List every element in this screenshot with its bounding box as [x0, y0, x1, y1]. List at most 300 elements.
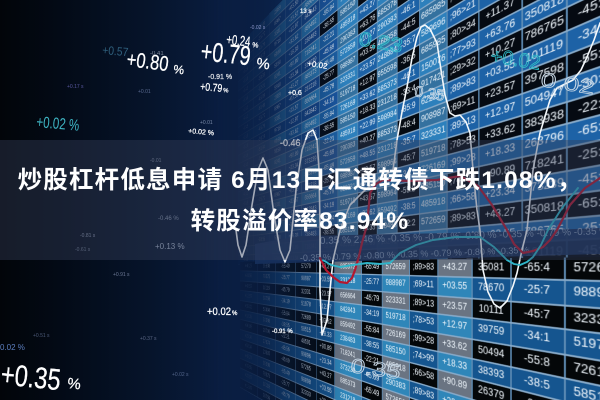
lower perspective data grid: 39759 [263, 296, 270, 303]
upper perspective data grid: +23.34 [289, 161, 298, 172]
upper perspective data grid: +18.33 [289, 232, 298, 240]
title [18, 166, 582, 234]
upper perspective data grid: -55:84 [258, 143, 265, 153]
upper perspective data grid: +33.6 [243, 152, 248, 160]
upper perspective data grid: 718241 [305, 242, 316, 250]
lower perspective data grid: 35698 [263, 263, 270, 270]
lower perspective data grid: -38:55 [364, 339, 379, 352]
upper perspective data grid: -22:2 [401, 217, 415, 229]
upper perspective data grid: -45:79 [258, 40, 265, 53]
upper perspective data grid: +33.62 [360, 207, 375, 218]
upper perspective data grid: +03.55 [289, 91, 298, 104]
upper perspective data grid: +18.3 [243, 238, 248, 244]
lower perspective data grid: -55:8 [524, 352, 550, 370]
upper perspective data grid: +12.97 [485, 100, 515, 122]
upper perspective data grid: 5918 [274, 256, 281, 262]
upper perspective data grid: ;99>28 [450, 152, 476, 169]
upper perspective data grid: 859492 [378, 204, 397, 216]
dim value labels: +0.13 % [155, 242, 185, 251]
upper perspective data grid: -65:49 [323, 161, 334, 172]
upper perspective data grid: -45:69 [258, 174, 265, 183]
upper perspective data grid: +23.3 [243, 257, 248, 263]
lower perspective data grid: -65:49 [364, 385, 379, 400]
upper perspective data grid: 656664 [305, 192, 316, 202]
upper perspective data grid: 842843 [305, 105, 316, 118]
upper perspective data grid: +33.6 [243, 228, 248, 235]
upper perspective data grid: +03.55 [485, 58, 515, 82]
lower perspective data grid: 323331 [386, 295, 406, 307]
upper perspective data grid: 885373 [378, 76, 397, 95]
upper perspective data grid: -35:7 [401, 134, 415, 148]
upper perspective data grid: +43.2 [243, 190, 248, 197]
lower perspective data grid: +43.27 [319, 263, 332, 271]
lower perspective data grid: +23.34 [319, 356, 332, 368]
lower perspective data grid: ;89>13 [413, 298, 434, 310]
upper perspective data grid: +12.97 [360, 72, 375, 89]
upper perspective data grid: -46:1 [401, 67, 415, 84]
lower perspective data grid: -34:1 [524, 329, 550, 346]
upper perspective data grid: 8241 [274, 157, 281, 166]
lower perspective data grid: -22:21 [364, 355, 379, 368]
upper perspective data grid: +23.57 [485, 79, 515, 102]
upper perspective data grid: +90.8 [243, 171, 248, 179]
upper perspective data grid: +43.27 [289, 79, 298, 93]
upper perspective data grid [243, 0, 600, 263]
lower perspective data grid: 35698 [263, 360, 270, 369]
upper perspective data grid: -34:19 [258, 133, 265, 143]
large value labels: +0.79 [199, 36, 252, 71]
lower perspective data grid: -45:56 [281, 344, 290, 354]
ghost teal and pale values on grid [349, 28, 596, 384]
upper perspective data grid: 2659 [274, 4, 281, 16]
upper perspective data grid: +23.34 [289, 255, 298, 262]
lower perspective data grid: 78670 [478, 283, 504, 296]
upper perspective data grid: 6169 [274, 135, 281, 145]
upper perspective data grid: ;89>13 [450, 249, 476, 261]
upper perspective data grid: +03.5 [243, 123, 248, 132]
dim value labels: +0.37 s [140, 336, 157, 342]
upper perspective data grid: -55:8 [401, 184, 415, 197]
large value labels: -0.46 [280, 138, 301, 148]
dim value labels: +0.17 s [67, 84, 84, 90]
upper perspective data grid: -65:49 [323, 55, 334, 70]
upper perspective data grid: 9718 [274, 212, 281, 220]
upper perspective data grid: 572659 [340, 41, 355, 59]
lower perspective data grid: +12.97 [319, 303, 332, 312]
lower perspective data grid: 58515 [301, 326, 311, 335]
dim value labels: -0.01 [150, 158, 162, 164]
ghost teal and pale values on grid: +0.02 [489, 45, 542, 75]
upper perspective data grid: +90.89 [289, 56, 298, 70]
lower perspective data grid: -45:69 [281, 356, 290, 365]
pale ticker band above lower grid: -0.35 % 0.79 % -0.80 % -0.35 % -0.79 % -0.80 % -0.35 % [300, 245, 529, 263]
large value labels: +0.80 [125, 48, 170, 76]
lower perspective data grid: +43.27 [442, 262, 467, 274]
upper perspective data grid: 238483 [305, 130, 316, 142]
upper perspective data grid: -38:55 [258, 71, 265, 83]
upper perspective data grid: +23.5 [243, 209, 248, 216]
title backdrop band [0, 140, 600, 260]
upper perspective data grid: 323331 [421, 124, 445, 142]
upper perspective data grid: 786765 [525, 222, 564, 238]
upper perspective data grid: 726169 [340, 211, 355, 221]
upper perspective data grid: 485918 [340, 239, 355, 248]
upper perspective data grid: 622279 [421, 87, 445, 108]
upper perspective data grid: 786765 [525, 14, 564, 45]
upper perspective data grid: 3331 [274, 201, 281, 209]
upper perspective data grid: 656664 [305, 92, 316, 106]
lower perspective data grid: 32331 [301, 288, 311, 296]
lower perspective data grid: 726169 [386, 328, 406, 341]
upper perspective data grid: 726169 [421, 160, 445, 176]
upper perspective data grid: -38:55 [258, 153, 265, 163]
upper perspective data grid: 373239 [525, 176, 564, 195]
upper perspective data grid: -45:6 [401, 234, 415, 245]
upper perspective data grid: +12.9 [243, 219, 248, 225]
large value labels: % [67, 375, 82, 393]
dim value labels: +0.51 s [33, 333, 50, 339]
upper perspective data grid: +10.27 [485, 37, 515, 63]
upper perspective data grid: ;89>13 [450, 113, 476, 133]
large value labels: +0.02 % [188, 128, 214, 137]
upper perspective data grid: 885373 [378, 124, 397, 140]
upper perspective data grid: -65:49 [258, 102, 265, 113]
upper perspective data grid: -22:21 [323, 28, 334, 45]
title: 转股溢价率83.94% [191, 208, 409, 234]
lower perspective data grid: +40.27 [245, 264, 252, 269]
upper perspective data grid: ;29>32 [450, 55, 476, 78]
dim value labels: -0.46 % [158, 216, 179, 222]
lower perspective data grid: 98898 [301, 375, 311, 386]
upper perspective data grid: -45:79 [258, 205, 265, 213]
large value labels: % [232, 311, 238, 317]
upper perspective data grid: +03.55 [289, 185, 298, 194]
lower perspective data grid: 51978 [301, 301, 311, 309]
upper perspective data grid: -44:5 [401, 16, 415, 35]
lower perspective data grid: -38:5 [524, 374, 550, 394]
upper perspective data grid: 3331 [274, 26, 281, 38]
upper perspective data grid: +33.62 [289, 126, 298, 138]
lower perspective data grid: +90.89 [442, 375, 467, 393]
upper perspective data grid: +03.5 [243, 46, 248, 57]
upper perspective data grid: -85:9 [401, 100, 415, 116]
lower perspective data grid: +43.57 [245, 283, 252, 290]
upper perspective data grid: 290383 [340, 253, 355, 262]
upper perspective data grid: 238483 [378, 220, 397, 231]
upper perspective data grid: 988987 [421, 232, 445, 244]
red trend curve [320, 176, 600, 283]
lower perspective data grid: -38:55 [281, 321, 290, 330]
lower perspective data grid: 859492 [340, 320, 355, 331]
large value labels: % [173, 62, 185, 77]
upper perspective data grid: 842843 [305, 4, 316, 22]
upper perspective data grid: +18.33 [485, 142, 515, 161]
lower perspective data grid: -55:84 [281, 310, 290, 318]
dim value labels: +0.02 s [172, 372, 189, 378]
upper perspective data grid: -48:4 [401, 117, 415, 132]
upper perspective data grid: 373239 [305, 255, 316, 262]
upper perspective data grid: -25:77 [323, 68, 334, 83]
upper perspective data grid: 485918 [340, 12, 355, 32]
upper perspective data grid: ;78>53 [450, 133, 476, 151]
ghost teal and pale values on grid: 0.02 [539, 69, 596, 99]
upper perspective data grid: 908987 [421, 106, 445, 125]
upper perspective data grid: +43.27 [485, 205, 515, 221]
upper perspective data grid: +63.76 [360, 12, 375, 32]
lower perspective data grid: +33.62 [442, 338, 467, 353]
lower perspective data grid: +12.97 [245, 383, 252, 392]
upper perspective data grid: +33.6 [243, 75, 248, 85]
upper perspective data grid: -45:69 [323, 148, 334, 160]
upper perspective data grid: +18.33 [289, 44, 298, 59]
dim value labels: -0.81 s [80, 233, 96, 239]
upper perspective data grid: 397598 [525, 60, 564, 88]
lower perspective data grid: 572659 [386, 263, 406, 272]
upper perspective data grid: 859492 [305, 117, 316, 130]
upper perspective data grid: -34:19 [323, 201, 334, 211]
upper perspective data grid: 101119 [525, 246, 563, 260]
upper perspective data grid: 988987 [340, 168, 355, 181]
dim value labels: -0.41 [150, 51, 164, 57]
upper perspective data grid: 598984 [378, 108, 397, 125]
pale ticker band above lower grid: 0.35 % 2.46 % -0.35 % -0.79 % -0.80 % -0.35 % -0.79 % -0.35 % [320, 226, 600, 247]
upper perspective data grid: +23.34 [485, 184, 515, 201]
lower perspective data grid: -65:4 [524, 262, 550, 275]
upper perspective data grid: 8987 [274, 190, 281, 198]
upper perspective data grid: +12.9 [243, 142, 248, 151]
upper perspective data grid: +23.57 [289, 103, 298, 115]
upper perspective data grid: +23.34 [360, 252, 375, 262]
large value labels: +0.6 [288, 90, 302, 97]
upper perspective data grid: 8987 [274, 15, 281, 27]
upper perspective data grid: -38:55 [323, 15, 334, 32]
upper perspective data grid: 589696 [421, 15, 445, 40]
lower perspective data grid: +23.57 [245, 373, 252, 382]
upper perspective data grid: ;77>93 [450, 36, 476, 60]
upper perspective data grid: -55:84 [258, 226, 265, 233]
lower perspective data grid: +03.55 [319, 276, 332, 285]
lower perspective data grid: 57279 [301, 263, 311, 271]
upper perspective data grid: -65:4 [401, 251, 415, 261]
upper perspective data grid: ;89>83 [450, 210, 476, 224]
lower perspective data grid: 26796 [263, 328, 270, 336]
large value labels [0, 9, 329, 397]
large value labels: +0.35 [0, 358, 62, 397]
upper perspective data grid: +03.5 [243, 200, 248, 207]
lower perspective data grid: +90.89 [319, 343, 332, 354]
lower perspective data grid: +90.89 [245, 323, 252, 331]
lower perspective data grid: 519718 [386, 312, 406, 324]
upper perspective data grid: +23.57 [360, 57, 375, 75]
upper perspective data grid: 485918 [421, 196, 445, 210]
upper perspective data grid: +23.57 [289, 197, 298, 206]
large value labels: +0.24 [226, 31, 251, 50]
upper perspective data grid: -34:1 [401, 167, 415, 180]
lower perspective data grid: +43.27 [319, 369, 332, 381]
upper perspective data grid: +23.5 [243, 56, 248, 67]
upper perspective data grid: -25:77 [258, 30, 265, 43]
lower perspective data grid: -65:49 [364, 263, 379, 272]
teal value label: +0.02 % [36, 114, 80, 135]
lower perspective data grid: 885373 [340, 377, 355, 390]
lower perspective data grid: +18.33 [245, 313, 252, 320]
large value labels: +0.02 [207, 306, 231, 318]
upper perspective data grid: 519718 [340, 83, 355, 99]
upper perspective data grid: 585150 [421, 178, 445, 193]
upper perspective data grid: 8241 [274, 245, 281, 252]
lower perspective data grid: 39759 [478, 323, 504, 339]
upper perspective data grid: 718241 [305, 42, 316, 58]
upper perspective data grid: 3331 [274, 113, 281, 123]
upper perspective data grid: +12.97 [289, 208, 298, 217]
upper perspective data grid: 685985 [421, 33, 445, 57]
upper perspective data grid: +22.99 [360, 117, 375, 132]
lower perspective data grid: 30398 [263, 317, 270, 325]
lower perspective data grid: 98987 [301, 276, 311, 283]
upper perspective data grid: 101119 [525, 38, 563, 66]
upper perspective data grid: +18.33 [360, 102, 375, 118]
lower perspective data grid: +33.02 [245, 303, 252, 310]
lower perspective data grid [241, 258, 600, 400]
upper perspective data grid: 519718 [421, 142, 445, 159]
upper perspective data grid: 585150 [340, 225, 355, 235]
upper perspective data grid: +10.27 [360, 27, 375, 46]
upper perspective data grid: -34:19 [258, 51, 265, 63]
upper perspective data grid: +23.3 [243, 104, 248, 113]
upper perspective data grid: 726169 [340, 97, 355, 113]
upper perspective data grid: -22:21 [323, 134, 334, 147]
lower perspective data grid: -55:84 [364, 324, 379, 336]
ghost teal and pale values on grid: 0.35 [349, 355, 402, 384]
lower perspective data grid: +03.55 [319, 383, 332, 395]
white trend curve [236, 23, 600, 335]
lower perspective data grid: 373239 [340, 362, 355, 376]
lower perspective data grid: 50494 [263, 306, 270, 314]
upper perspective data grid: 150076 [421, 51, 445, 74]
upper perspective data grid: +33.62 [485, 121, 515, 142]
upper perspective data grid: +33.62 [360, 87, 375, 104]
lower perspective data grid: 23987 [263, 349, 270, 358]
upper perspective data grid: ;66>58 [450, 191, 476, 206]
upper perspective data grid: 6169 [274, 48, 281, 59]
lower perspective data grid: 988987 [386, 279, 406, 290]
upper perspective data grid: 842843 [305, 205, 316, 214]
upper perspective data grid: 231218 [378, 92, 397, 110]
upper perspective data grid: +18.33 [289, 138, 298, 149]
lower perspective data grid: 57265 [301, 363, 311, 374]
upper perspective data grid: 9718 [274, 37, 281, 48]
upper perspective data grid: 373239 [305, 54, 316, 70]
upper perspective data grid: 5918 [274, 168, 281, 177]
upper perspective data grid: 263796 [525, 130, 564, 152]
lower perspective data grid: 656664 [340, 291, 355, 301]
large value labels: 13 s [300, 9, 311, 15]
upper perspective data grid: -38:55 [258, 236, 265, 243]
lower perspective data grid: 231218 [340, 277, 355, 286]
upper perspective data grid: ;74>99 [450, 171, 476, 188]
lower perspective data grid: 78675 [263, 371, 270, 380]
dim value labels: +0.91 s [113, 272, 130, 278]
upper perspective data grid: +12.9 [243, 66, 248, 76]
upper perspective data grid: 238483 [305, 29, 316, 46]
upper perspective data grid: 373239 [305, 155, 316, 166]
upper perspective data grid: 8987 [274, 102, 281, 113]
upper perspective data grid: +63.76 [485, 16, 515, 43]
lower perspective data grid: ;66>58 [413, 368, 434, 384]
large value labels: % [223, 88, 229, 95]
large value labels: -0.91 % [272, 329, 293, 335]
lower perspective data grid: +12.57 [245, 293, 252, 300]
lower perspective data grid: ;99>28 [413, 333, 434, 347]
upper perspective data grid: 859492 [305, 217, 316, 226]
lower perspective data grid: ;78>53 [413, 315, 434, 328]
lower perspective data grid: 238483 [340, 334, 355, 346]
ghost teal and pale values on grid: 0.35 [413, 83, 446, 105]
upper perspective data grid: 290383 [340, 140, 355, 154]
upper perspective data grid: -38:5 [401, 201, 415, 213]
title: 炒股杠杆低息申请 6月13日汇通转债下跌1.08%， [18, 167, 582, 194]
dim value labels: +0.57 [102, 43, 129, 59]
upper perspective data grid: 468858 [378, 28, 397, 49]
upper perspective data grid: -45:69 [258, 92, 265, 103]
upper perspective data grid: +43.57 [360, 162, 375, 175]
upper perspective data grid: +90.89 [289, 243, 298, 251]
large value labels: +0.79 [200, 81, 223, 95]
upper perspective data grid: -45:79 [323, 188, 334, 198]
upper perspective data grid: -25:77 [323, 174, 334, 185]
lower perspective data grid: -45:79 [281, 286, 290, 294]
upper perspective data grid: +48.55 [360, 147, 375, 161]
upper perspective data grid: -38:55 [323, 227, 334, 236]
upper perspective data grid: 585150 [340, 111, 355, 126]
lower perspective data grid: -45:79 [364, 293, 379, 304]
large value labels: % [252, 42, 259, 50]
upper perspective data grid: 2659 [274, 179, 281, 188]
lower perspective data grid: -34:19 [364, 309, 379, 320]
lower perspective data grid: -22:21 [281, 333, 290, 342]
upper perspective data grid: 5150 [274, 58, 281, 70]
upper perspective data grid: 572659 [421, 214, 445, 227]
ghost teal and pale values on grid: 0.23 [357, 28, 404, 58]
upper perspective data grid: 5150 [274, 146, 281, 155]
lower perspective data grid: 99896 [301, 350, 311, 361]
lower perspective data grid: 842843 [340, 306, 355, 316]
upper perspective data grid: ;89>83 [450, 75, 476, 96]
large value labels: -0.91 % [208, 74, 232, 81]
lower perspective data grid: +18.33 [319, 330, 332, 340]
lower perspective data grid: +43.27 [245, 353, 252, 361]
upper perspective data grid: 718241 [525, 153, 564, 174]
lower perspective data grid: 78675 [263, 274, 270, 281]
lower perspective data grid: 485918 [386, 360, 406, 375]
upper perspective data grid: 718241 [305, 142, 316, 154]
upper perspective data grid: 248884 [378, 44, 397, 65]
upper perspective data grid: 859492 [305, 17, 316, 34]
upper perspective data grid: 373239 [378, 252, 397, 261]
upper perspective data grid: 383938 [525, 107, 564, 131]
lower perspective data grid: -25:7 [524, 284, 550, 299]
upper perspective data grid: ;69>11 [450, 229, 475, 242]
lower perspective data grid: ;89>83 [413, 262, 434, 273]
upper perspective data grid: +18.3 [243, 85, 248, 95]
upper perspective data grid: -22:21 [323, 241, 334, 249]
upper perspective data grid: 238483 [305, 230, 316, 238]
upper perspective data grid: -38:55 [323, 121, 334, 134]
upper perspective data grid: -55:84 [323, 2, 334, 19]
upper perspective data grid: -45:69 [258, 256, 265, 263]
lower perspective data grid: 72689 [301, 313, 311, 322]
upper perspective data grid: -45:7 [401, 150, 415, 164]
